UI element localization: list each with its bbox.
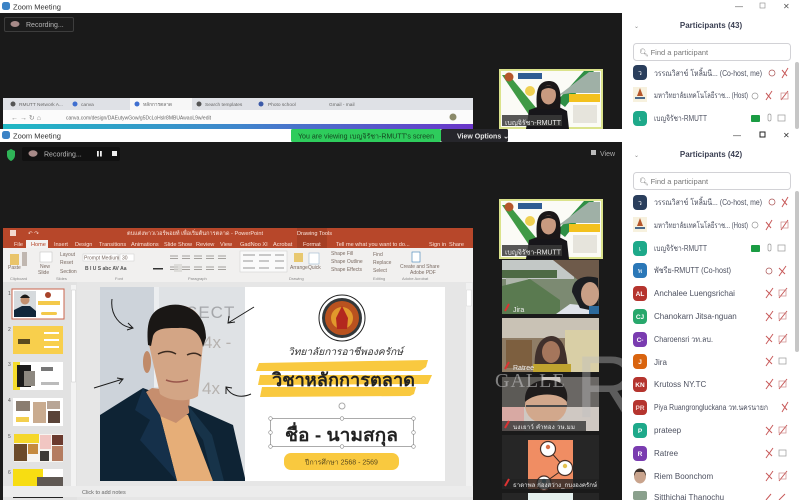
watermark: gallery: GALLE [495,370,566,392]
banner: viewing screen notice: View Options ⌄ [457,134,509,140]
participants panel: lower [622,129,800,500]
participant row: co-host me: วรรณวิสาข์ โหลิ้มนี... (Co-host, me) [654,196,762,207]
powerpoint title bar and tabs: Transitions [99,242,126,248]
powerpoint ribbon: Adobe Acrobat [402,276,429,281]
powerpoint ribbon: Quick [308,265,321,271]
participant row: co-host: พัชรีย-RMUTT (Co-host) [654,266,731,275]
powerpoint ribbon: Editing [373,276,385,281]
slide thumbnail pane: 1 [8,291,11,297]
participant row: Anchalee [633,286,787,301]
powerpoint title bar and tabs: Format [303,242,321,248]
participants panel: upper: ⌄ [634,24,639,30]
participant row: presenter: เบญจิรัชา-RMUTT [654,244,707,253]
thumbnail 2 [13,326,63,354]
powerpoint title bar and tabs: Sign in [429,242,446,248]
participants panel: lower: Participants (42) [680,150,742,159]
powerpoint ribbon: Find [373,252,383,258]
recording badge: upper window [4,18,74,32]
slide thumbnail pane: 3 [8,362,11,368]
participants panel: upper: ✕ [783,2,790,11]
thumbnail 5 [14,434,63,462]
powerpoint title bar and tabs: Slide Show [164,242,193,248]
video tile: presenter, lower window: เบญจิรัชา-RMUTT [505,248,562,256]
participant row: Krutoss: KN [635,382,645,389]
participant row: host [633,87,788,102]
title bar: upper zoom window [0,0,622,13]
video tile: Jira: Jira [513,307,524,314]
powerpoint ribbon: Layout [60,252,76,258]
powerpoint ribbon: Adobe PDF [410,270,436,276]
view button [591,150,616,158]
slide scrollbar [466,283,472,487]
banner: viewing screen notice: You are viewing เบญจิรัชา-RMUTT's screen [298,132,434,140]
powerpoint title bar and tabs: Tell me what you want to do... [336,242,410,248]
title bar: lower zoom window: Zoom Meeting [13,132,61,140]
powerpoint title bar and tabs: Drawing Tools [297,231,332,237]
powerpoint ribbon: Slide [38,270,49,276]
participant row: Riem [634,468,787,484]
recording badge: upper window: Recording... [26,22,64,29]
powerpoint title bar and tabs: Home [31,242,46,248]
slide photo: man at whiteboard: SECT [186,303,235,322]
participants panel: upper: 🔍︎ Find a participant [639,48,709,57]
participant row: prateep: prateep [654,426,682,435]
participant row: co-host me: ว [638,200,642,207]
shared browser window strip: ← → ↻ ⌂ [11,115,41,122]
video tile: presenter, lower window [499,199,603,259]
powerpoint ribbon: Select [373,268,388,274]
academic year pill [284,453,399,470]
video tile: third participant: นงเยาว์ คำทอง วษ.มม [513,423,575,431]
slide photo: man at whiteboard [100,287,245,481]
video tile: third participant [502,377,599,431]
slide: title slide [94,287,445,481]
subject heading: วิชาหลักการตลาด [271,370,415,390]
shared browser window strip: canva.com/design/DAEutywGow/g5DcLoHslr8MBUAwaoL9w/edit [66,116,212,122]
powerpoint ribbon: Paragraph [188,276,207,281]
participant row: co-host me: ว [638,70,642,77]
powerpoint title bar and tabs: View [220,242,233,248]
powerpoint ribbon: 30 [122,256,128,262]
participant row: host: มหาวิทยาลัยเทคโนโลยีราช... (Host) [654,220,748,230]
powerpoint ribbon: Slides [56,276,67,281]
participant row: presenter: เบญจิรัชา-RMUTT [654,114,707,123]
view button: View [600,151,616,158]
thumbnail 1 [12,289,64,319]
participant row: presenter: เ [639,246,641,253]
video tile: avatar placeholder: ธาดาพล ก่องสว่าง_กบงองครักษ์ [513,481,597,489]
powerpoint title bar and tabs: GadNoo XI [240,242,268,248]
powerpoint title bar and tabs: Acrobat [273,242,293,248]
participant row: co-host me [633,65,788,80]
video tile: presenter, upper window [499,69,603,129]
participant row: host [633,217,788,232]
participant row: presenter: เ [639,116,641,123]
participant row: Charoensri: C- [637,337,643,344]
participant row: co-host me [633,195,788,210]
notes bar: Click to add notes [82,490,126,496]
title bar: lower zoom window [0,129,622,142]
participant row: co-host me: วรรณวิสาข์ โหลิ้มนี... (Co-host, me) [654,67,762,78]
participants panel: lower: 🔍︎ Find a participant [639,177,709,186]
participant row: Ratree: R [638,451,643,458]
powerpoint ribbon: Font [115,276,124,281]
powerpoint ribbon: Create and Share [400,264,440,270]
participant row: Ratree: Ratree [654,449,679,458]
participant row: Chanokarn [633,309,787,324]
participants panel: lower: — [733,131,741,140]
college name: วิทยาลัยการอาชีพองครักษ์ [288,346,405,358]
powerpoint title bar and tabs: ↶ ↷ [28,230,39,237]
slide thumbnail pane: 5 [8,434,11,440]
participants panel: lower: ⌄ [634,153,639,159]
powerpoint ribbon: Reset [60,260,74,266]
video tile: presenter, upper window: เบญจิรัชา-RMUTT [505,119,562,127]
shared browser window strip: หลักการตลาด [143,102,172,108]
slide thumbnail pane: 6 [8,470,11,476]
participant row: Chanokarn: Chanokarn Jitsa-nguan [654,312,737,321]
banner: viewing screen notice [291,129,509,142]
powerpoint title bar and tabs: File [14,242,23,248]
participant row: Ratree [633,446,786,461]
slide thumbnail pane [3,282,77,500]
powerpoint ribbon: Shape Effects [331,267,363,273]
participants panel: upper: — [735,2,743,11]
powerpoint ribbon: Replace [373,260,392,266]
participant row: Chanokarn: CJ [636,314,645,321]
participant row: presenter [633,241,785,256]
shared browser window strip [3,98,473,129]
watermark: gallery [495,337,639,436]
shared browser window strip: Gmail - mail [329,102,355,108]
participant row: prateep [633,423,787,438]
powerpoint ribbon: Section [60,269,77,275]
powerpoint ribbon: Arrange [290,265,308,271]
participants panel: upper [622,0,800,129]
college logo [319,295,365,341]
title bar: upper zoom window: Zoom Meeting [13,2,61,12]
powerpoint ribbon: Shape Fill [331,251,353,257]
shared browser window strip: RMUTT Network A... [19,102,63,108]
participant row: co-host [633,263,786,278]
powerpoint ribbon: Clipboard [10,276,27,281]
recording badge: lower window [22,147,120,161]
watermark: gallery: R [575,337,639,436]
thumbnail 4 [13,398,63,426]
rotate handle [339,403,345,409]
slide thumbnail pane: 2 [8,327,11,333]
thumbnail 3 [13,362,63,390]
shared browser window strip: canva [81,103,94,108]
slide photo: man at whiteboard: 4x [202,379,220,398]
thumbnail 6 [13,469,63,498]
participant row: prateep: P [638,428,643,435]
participant row: Jira: Jira [654,358,667,367]
notes bar [3,486,473,497]
powerpoint ribbon: Drawing [289,276,304,281]
powerpoint title bar and tabs: Animations [131,242,159,248]
participant row: co-host: พ [638,268,642,275]
powerpoint title bar and tabs: Insert [54,242,68,248]
participant row: Anchalee: Anchalee Luengsrichai [654,289,735,298]
shared browser window strip: Search templates [205,102,243,108]
participant row: Jira [633,354,786,369]
participant row: Sitthichai [633,491,785,500]
participant row: Charoensri: Charoensri วท.ลบ. [654,335,713,344]
slide photo: man at whiteboard: 4x - [203,333,231,352]
security shield icon [7,149,15,161]
powerpoint title bar and tabs [3,228,473,248]
participant row: Piya: PR [635,405,645,412]
participant row: Piya: Piya Ruangrongluckana วท.นครนายก [654,403,768,412]
hand-drawn arrows on slide [94,299,254,396]
participants panel: lower: ✕ [783,131,790,140]
powerpoint ribbon: Shape Outline [331,259,363,265]
participant row: Charoensri [633,332,787,347]
powerpoint ribbon: B I U S abc AV Aa [85,266,127,272]
powerpoint ribbon: Prompt Medium [84,256,119,262]
powerpoint title bar and tabs: Design [75,242,92,248]
participant row: Anchalee: AL [636,291,644,298]
participant row: Piya [633,400,788,415]
selection box with name placeholder [269,417,415,448]
powerpoint ribbon: Paste [8,265,21,271]
powerpoint title bar and tabs: Share [449,242,464,248]
video tile: Jira [502,260,599,314]
powerpoint workspace [3,282,473,500]
participant row: Riem: Riem Boonchom [654,472,713,481]
recording badge: lower window: Recording... [44,152,82,158]
video tile: avatar placeholder [502,435,599,490]
video tile: partially visible [502,493,599,500]
yellow brush strokes [256,360,432,397]
shared browser window strip: Photo school [268,102,296,108]
participant row: Krutoss [633,377,787,392]
video tile: Ratree: Ratree [513,365,534,372]
slide thumbnail pane: 4 [8,398,11,404]
participants panel: upper: Participants (43) [680,21,742,30]
powerpoint title bar and tabs: Review [196,242,215,248]
video tile: Ratree [502,318,599,372]
participant row: presenter [633,111,785,126]
powerpoint title bar and tabs: ตบแต่งพาวเวอร์พอยท์ เพื่อเริ่มต้นการตลาด - PowerPoint [127,229,264,237]
participant row: Jira: J [638,359,642,366]
powerpoint ribbon: New [40,264,50,270]
powerpoint ribbon [3,248,473,282]
selection box with name placeholder: ชื่อ - นามสกุล [285,422,398,447]
participant row: host: มหาวิทยาลัยเทคโนโลยีราช... (Host) [654,90,748,100]
powerpoint window [3,228,473,500]
participant row: Krutoss: Krutoss NY.TC [654,380,707,389]
academic year pill: ปีการศึกษา 2568 - 2569 [305,458,378,466]
